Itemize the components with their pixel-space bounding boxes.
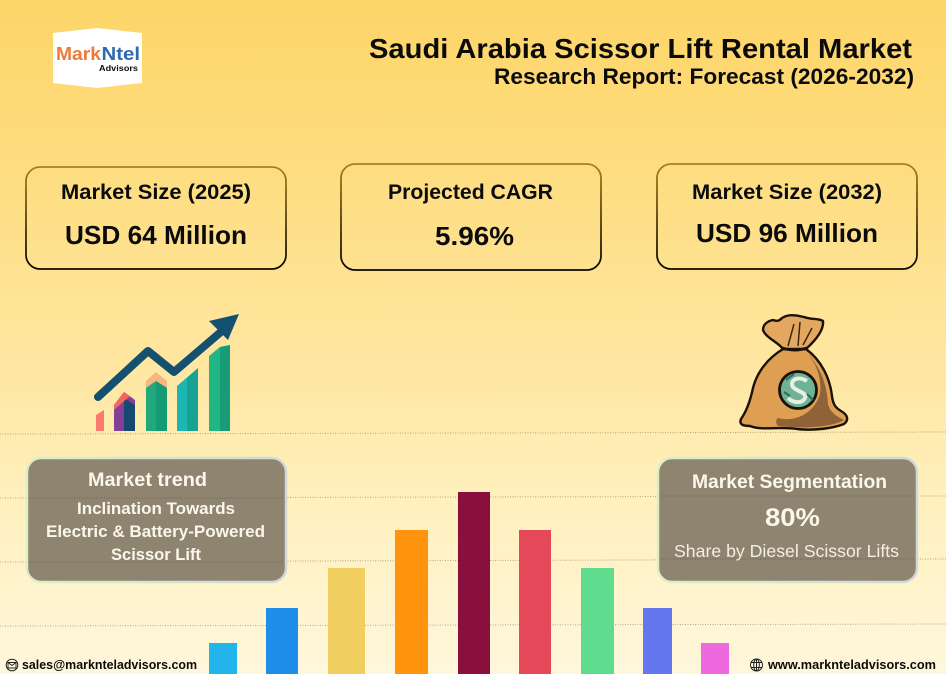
panel: market trend: Market trend <box>88 470 207 491</box>
panel: projected CAGR <box>341 164 601 270</box>
panel: market trend: Scissor Lift <box>111 545 201 564</box>
panel: projected CAGR: Projected CAGR <box>388 181 553 204</box>
panel: market size 2025: USD 64 Million <box>65 220 247 250</box>
contact: email: sales@marknteladvisors.com <box>22 657 197 672</box>
panel: market segmentation: Share by Diesel Scissor Lifts <box>674 541 899 561</box>
panel: market segmentation <box>658 458 917 582</box>
logo <box>53 28 142 88</box>
logo: Advisors <box>99 63 138 73</box>
title: Saudi Arabia Scissor Lift Rental Market <box>369 33 912 64</box>
panel: projected CAGR: 5.96% <box>435 221 514 251</box>
panel: market segmentation: Market Segmentation <box>692 472 887 493</box>
panel: market trend: Electric & Battery-Powered <box>46 522 265 541</box>
logo: Mark <box>56 43 102 64</box>
panel: market trend: Inclination Towards <box>77 499 235 518</box>
title: Research Report: Forecast (2026-2032) <box>494 64 914 89</box>
contact: website: www.marknteladvisors.com <box>767 657 936 672</box>
panel: market size 2025 <box>26 167 286 269</box>
panel: market size 2032: Market Size (2032) <box>692 181 882 204</box>
icon: growth chart <box>96 314 239 431</box>
panel: market size 2032 <box>657 164 917 269</box>
panel: market segmentation: 80% <box>765 504 820 532</box>
bar chart <box>209 492 729 674</box>
logo: Ntel <box>102 43 140 64</box>
panel: market trend <box>27 458 286 582</box>
title <box>369 33 914 89</box>
icon: money bag <box>740 315 847 430</box>
panel: market size 2025: Market Size (2025) <box>61 181 251 204</box>
panel: market size 2032: USD 96 Million <box>696 218 878 248</box>
